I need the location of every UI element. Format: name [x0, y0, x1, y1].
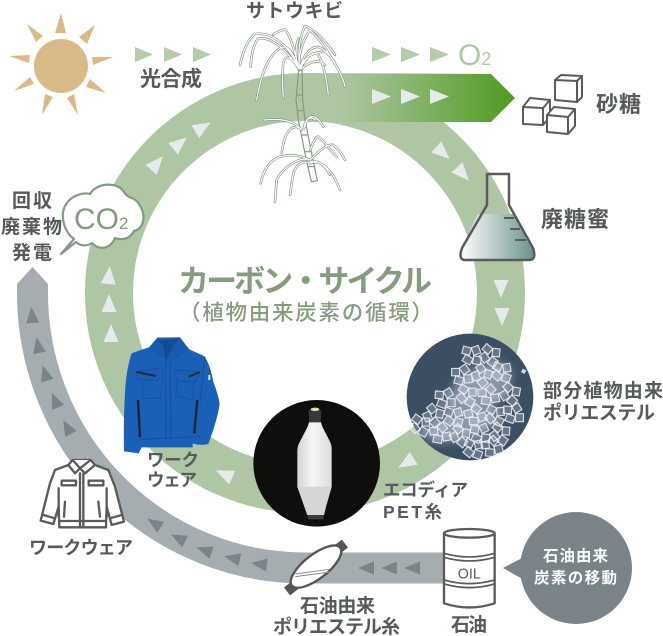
icon: polyester yarn spool: [284, 538, 348, 595]
label: work wear (plant): [147, 450, 199, 490]
photo: ecodear PET yarn spool: [253, 400, 380, 527]
label: partially plant-derived polyester: ポリエステル: [543, 401, 655, 424]
callout: movement of petroleum-derived carbon: 石油由来: [543, 547, 608, 565]
label: O2: O2: [458, 39, 491, 72]
icon: flask with molasses: [460, 174, 535, 260]
label: partially plant-derived polyester: 部分植物由来: [543, 380, 663, 402]
photo: polyester pellets: [407, 334, 533, 460]
icon: oil barrel: [444, 529, 495, 607]
title: carbon cycle: カーボン・サイクル: [178, 264, 432, 299]
label: work wear (plant): ウェア: [147, 470, 197, 490]
sugarcane illustration: [240, 26, 345, 202]
grey petroleum carbon arrow: [17, 267, 445, 568]
label: ecodear PET yarn: エコディア: [383, 480, 468, 500]
label: sugarcane: サトウキビ: [246, 0, 343, 22]
callout: movement of petroleum-derived carbon: [503, 512, 632, 624]
label: petroleum-derived polyester yarn: 石油由来: [300, 595, 375, 617]
icon: work wear outline: [41, 460, 124, 527]
label: work wear (petroleum): ワークウェア: [29, 538, 133, 558]
sun icon: [9, 13, 113, 115]
label: waste recovery and power generation: 回収: [12, 190, 52, 212]
light flow triangles on green ring: [101, 116, 510, 485]
label: ecodear PET yarn: PET糸: [383, 502, 442, 522]
green carbon cycle ring: [109, 97, 501, 489]
label: petroleum: 石油: [451, 614, 487, 636]
CO2 speech cloud: [61, 185, 143, 254]
green gradient arrow to sugar: [305, 73, 515, 122]
CO2 speech cloud: CO2: [74, 203, 128, 236]
photo: blue work jacket: [124, 337, 220, 453]
arrow triangles on gradient: [372, 89, 449, 104]
label: waste recovery and power generation: 廃棄物: [1, 215, 62, 238]
dark flow triangles on grey band: [25, 306, 420, 574]
label: molasses: 廃糖蜜: [541, 207, 609, 232]
photosynthesis triangles: [135, 47, 211, 62]
icon: oil barrel: OIL: [458, 566, 481, 582]
label: work wear (plant): ワーク: [147, 450, 199, 470]
callout: movement of petroleum-derived carbon: 炭素の移動: [534, 569, 617, 587]
label: waste recovery and power generation: 発電: [12, 242, 52, 264]
icon: sugar cubes: [523, 75, 582, 134]
label: petroleum-derived polyester yarn: [273, 595, 400, 636]
label: waste recovery and power generation: [1, 190, 62, 264]
oxygen triangles: [372, 47, 449, 62]
label: sugar: 砂糖: [596, 92, 641, 117]
label: ecodear PET yarn: [383, 480, 468, 522]
label: partially plant-derived polyester: [543, 380, 663, 424]
label: photosynthesis: 光合成: [140, 67, 202, 91]
subtitle: （植物由来炭素の循環）: [179, 301, 433, 325]
